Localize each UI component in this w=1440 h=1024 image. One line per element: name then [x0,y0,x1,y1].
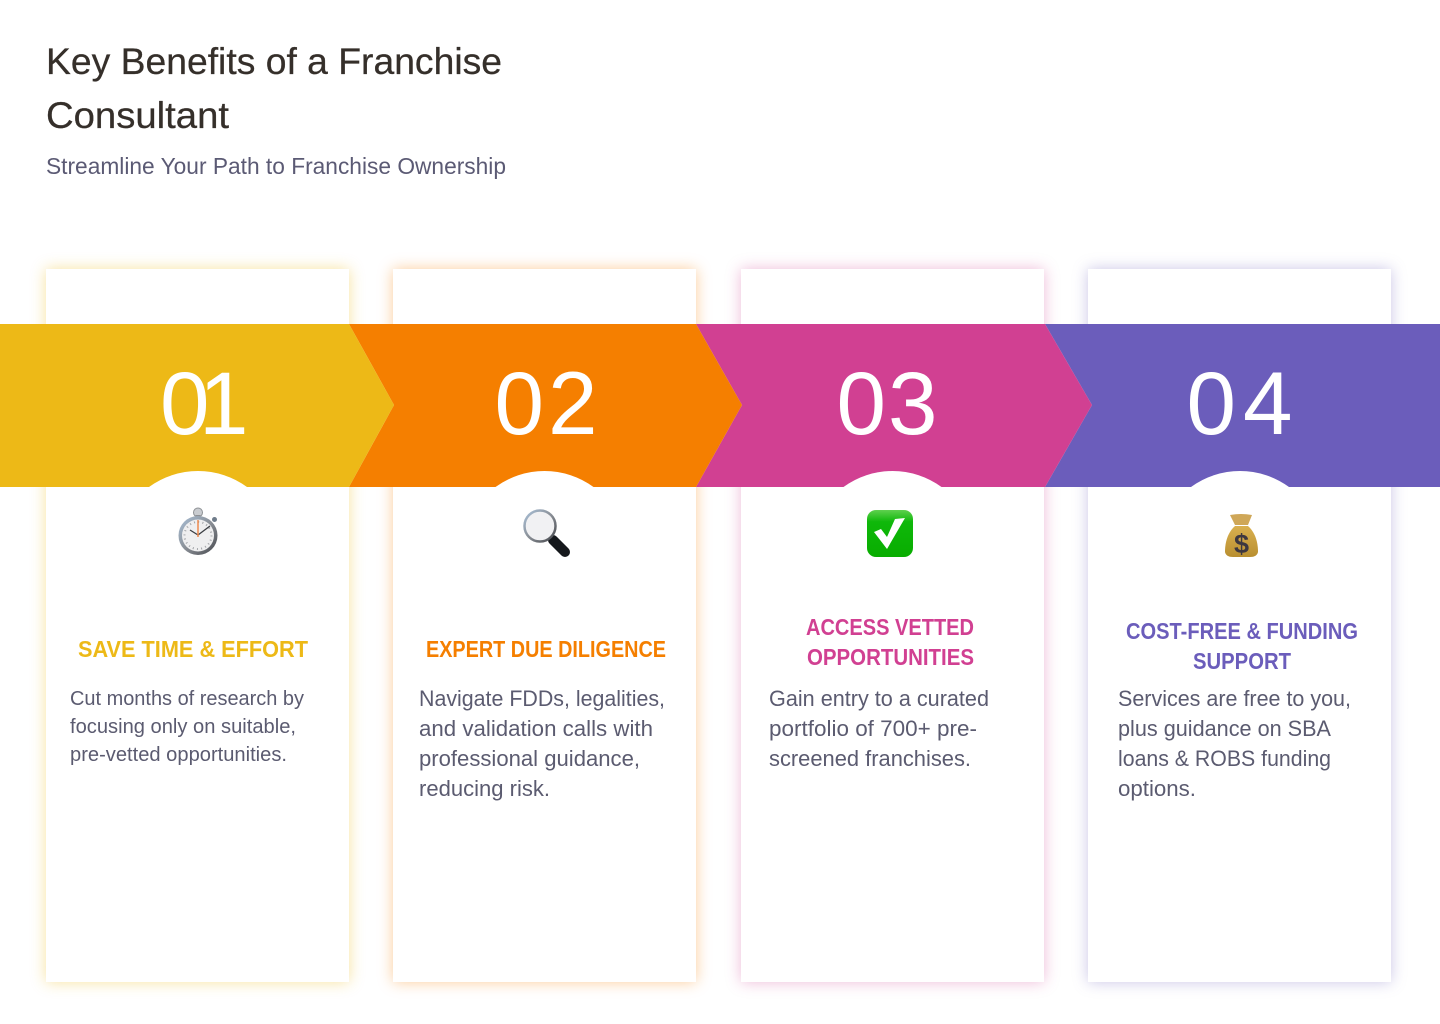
body: card 2: Navigate FDDs, legalities, [419,686,665,711]
arrow 2 [349,324,742,487]
subtitle: Streamline Your Path to Franchise Ownership [46,153,506,179]
icon: money bag: $ [1234,529,1249,559]
body: card 1: pre-vetted opportunities. [70,744,287,766]
heading: due diligence: EXPERT DUE DILIGENCE [426,636,666,662]
body: card 4 [1118,686,1351,801]
body: card 4: Services are free to you, [1118,686,1351,711]
title: Consultant [46,95,230,136]
heading: save time: SAVE TIME & EFFORT [78,636,308,662]
title: Key Benefits of a Franchise [46,41,502,82]
arc notch 3 [844,471,942,487]
heading: vetted opportunities: OPPORTUNITIES [807,644,974,670]
heading: vetted opportunities [806,614,974,670]
body: card 3: Gain entry to a curated [769,686,989,711]
arrow 4 [1045,324,1440,487]
panel: card 1 background [46,269,349,982]
body: card 3: screened franchises. [769,746,971,771]
number 01: 01 [160,353,248,453]
number 03: 03 [836,353,938,453]
body: card 1: focusing only on suitable, [70,716,296,738]
arc notch 2 [496,471,594,487]
panel: card 2 background [393,269,696,982]
body: card 3 [769,686,989,771]
heading: cost-free funding [1126,618,1358,674]
body: card 1: Cut months of research by [70,688,304,710]
arrow 1 [0,324,394,487]
arc notch 4 [1191,471,1289,487]
arc notch 1 [149,471,247,487]
body: card 4: plus guidance on SBA [1118,716,1331,741]
card 3 text [769,614,989,771]
icon: money bag [1225,514,1258,559]
icon: stopwatch [178,508,218,555]
body: card 4: options. [1118,776,1196,801]
heading: cost-free funding: COST-FREE & FUNDING [1126,618,1358,644]
icon: check mark [867,510,913,557]
card 1 text [70,636,308,766]
icon: magnifying glass [524,510,565,552]
body: card 2: and validation calls with [419,716,653,741]
panel: card 4 background [1088,269,1391,982]
body: card 2: reducing risk. [419,776,550,801]
heading: vetted opportunities: ACCESS VETTED [806,614,974,640]
body: card 2 [419,686,665,801]
body: card 4: loans & ROBS funding [1118,746,1331,771]
body: card 1 [70,688,304,766]
number 04: 04 [1186,353,1292,453]
panel: card 3 background [741,269,1044,982]
body: card 2: professional guidance, [419,746,640,771]
card 4 text [1118,618,1358,801]
arrow 3 [696,324,1092,487]
body: card 3: portfolio of 700+ pre- [769,716,977,741]
title [46,41,502,136]
arrow band [0,324,1440,487]
heading: cost-free funding: SUPPORT [1193,648,1291,674]
card 2 text [419,636,666,801]
number 02: 02 [494,353,598,453]
